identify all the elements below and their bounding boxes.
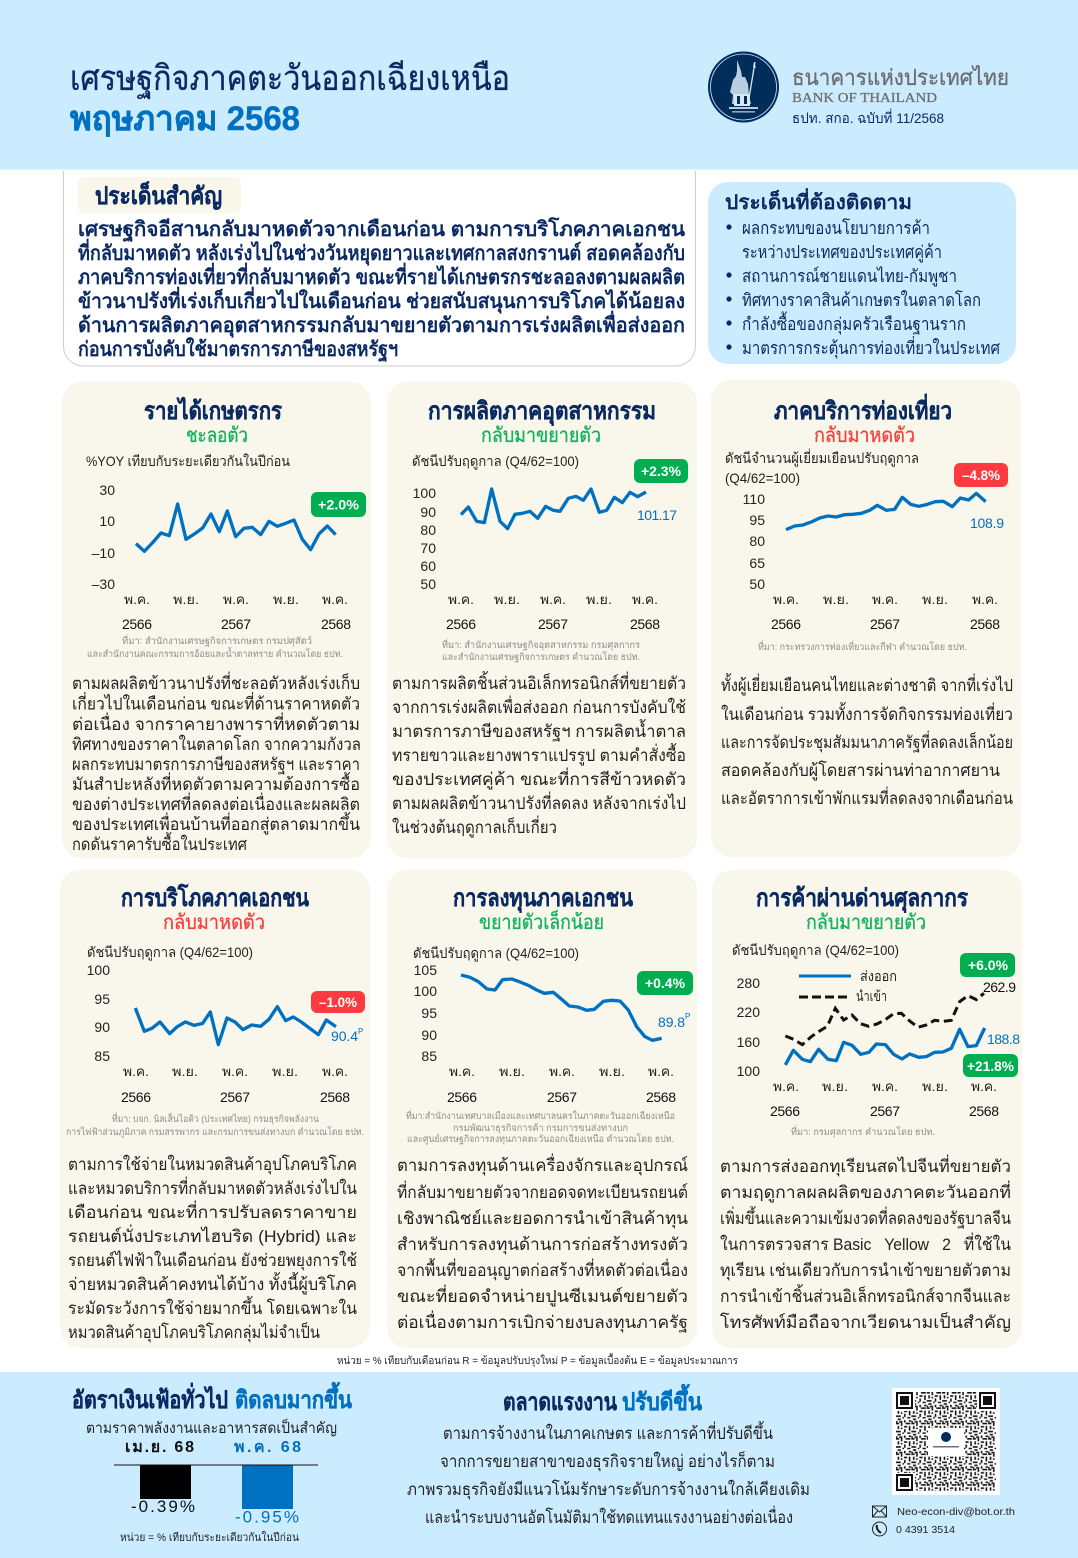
bullet list xyxy=(726,218,1000,359)
contact: phone: 0 4391 3514 xyxy=(896,1524,955,1536)
line chart: private investment: 2566 xyxy=(447,1089,477,1105)
line chart: industrial production: พ.ย. xyxy=(494,592,520,607)
text block: border trade: ในการตรวจสาร Basic Yellow 2 ที่ใช้ใน xyxy=(720,1232,1011,1254)
heading: labour market: ตลาดแรงงาน xyxy=(503,1389,617,1416)
text block: labour market xyxy=(407,1421,810,1527)
badge: +2.0%: +2.0% xyxy=(318,496,360,512)
text block: private consumption xyxy=(68,1154,357,1343)
line chart: industrial production: พ.ค. xyxy=(540,592,566,607)
source note: และสำนักงานเศรษฐกิจการเกษตร คำนวณโดย ธปท. xyxy=(442,651,640,663)
data label: 108.9: 108.9 xyxy=(970,515,1004,531)
line chart: farm income: พ.ค. xyxy=(223,592,249,607)
line chart: private investment: 90 xyxy=(421,1027,437,1043)
text block: private consumption: และหมวดบริการที่กลับมาหดตัวหลังเร่งไปใน xyxy=(68,1176,357,1198)
status: slowing: ชะลอตัว xyxy=(186,424,248,447)
line chart: border trade: พ.ค. xyxy=(971,1079,997,1094)
line chart: private investment: 95 xyxy=(421,1005,437,1021)
text block: border trade: ตามฤดูกาลผลผลิตของภาคตะวันออกที่ xyxy=(720,1180,1011,1203)
legend: exports and imports: ส่งออก xyxy=(860,968,897,984)
text block: key points summary: ที่กลับมาหดตัว หลังเร่งไปในช่วงวันหยุดยาวและเทศกาลสงกรานต์ สอดคล้องกับ xyxy=(78,238,685,266)
text block: industrial production: ตามผลผลิตข้าวนาปรังที่ลดลง หลังจากเร่งไป xyxy=(392,791,686,813)
line chart: farm income: 30 xyxy=(99,482,115,498)
bar chart: inflation: เม.ย. 68 xyxy=(125,1439,194,1456)
line chart: border trade: 220 xyxy=(737,1004,760,1020)
line chart: private investment: 105 xyxy=(414,962,437,978)
bank name xyxy=(792,65,1009,126)
source note: ที่มา:สำนักงานเทศบาลเมืองและเทศบาลนครในภาคตะวันออกเฉียงเหนือ xyxy=(406,1109,675,1122)
status: contracting: กลับมาหดตัว xyxy=(163,911,265,934)
line chart: industrial production: 70 xyxy=(420,540,436,556)
line chart: tourism services xyxy=(743,491,1000,632)
text block: border trade: ตามการส่งออกทุเรียนสดไปจีนที่ขยายตัว xyxy=(720,1154,1011,1177)
bar chart: inflation: -0.95% xyxy=(235,1508,299,1526)
panel: key points xyxy=(64,140,696,366)
text block: tourism services xyxy=(721,673,1013,808)
data label: 89.8P: 89.8 xyxy=(658,1014,685,1030)
heading: private consumption: การบริโภคภาคเอกชน xyxy=(121,883,309,912)
line chart: private investment: 2567 xyxy=(547,1089,577,1105)
source note: ที่มา: สำนักงานเศรษฐกิจการเกษตร กรมปศุสัตว์ xyxy=(122,634,312,647)
line chart: border trade: 160 xyxy=(737,1034,760,1050)
source note: ที่มา: บจก. นิลเส็นไอคิว (ประเทศไทย) กรมธุรกิจพลังงาน xyxy=(112,1112,319,1125)
chart unit: ดัชนีปรับฤดูกาล (Q4/62=100) xyxy=(412,453,579,470)
data label: 101.17: 101.17 xyxy=(637,507,677,523)
text block: private investment: ต่อเนื่องตามการเบิกจ่ายงบลงทุนภาครัฐ xyxy=(397,1310,688,1333)
line chart: industrial production: 100 xyxy=(413,485,436,501)
source note xyxy=(442,638,640,663)
text block: tourism services: ในเดือนก่อน รวมทั้งการจัดกิจกรรมท่องเที่ยว xyxy=(721,702,1013,724)
QR code xyxy=(892,1388,1000,1495)
line chart: private consumption: พ.ค. xyxy=(123,1064,149,1079)
text block: private consumption: รถยนต์นั่งประเภทไฮบริด (Hybrid) และ xyxy=(68,1224,357,1246)
source note xyxy=(66,1112,364,1138)
subtitle: month: พฤษภาคม 2568 xyxy=(70,100,300,138)
line chart: border trade: พ.ย. xyxy=(822,1079,848,1094)
line chart: private consumption: 85 xyxy=(94,1048,110,1064)
text block: tourism services: ทั้งผู้เยี่ยมเยือนคนไทยและต่างชาติ จากที่เร่งไป xyxy=(721,673,1013,696)
line chart: border trade: พ.ค. xyxy=(872,1079,898,1094)
panel: border trade xyxy=(712,870,1022,1348)
line chart: industrial production: 2566 xyxy=(446,616,476,632)
panel: private investment xyxy=(387,870,697,1348)
panel: tourism services xyxy=(711,380,1021,857)
source note: และศูนย์เศรษฐกิจการลงทุนภาคตะวันออกเฉียงเหนือ คำนวณโดย ธปท. xyxy=(407,1133,674,1145)
heading: inflation xyxy=(72,1381,352,1414)
line chart: tourism services: พ.ย. xyxy=(823,592,849,607)
source note: กรมพัฒนาธุรกิจการค้า กรมการขนส่งทางบก xyxy=(453,1123,628,1134)
line chart: farm income: –30 xyxy=(92,576,115,592)
line chart: private consumption: 2567 xyxy=(220,1089,250,1105)
text block: farm income: ของประเทศเพื่อนบ้านที่ออกสู่ตลาดมากขึ้น xyxy=(72,812,360,835)
source note: การไฟฟ้าส่วนภูมิภาค กรมสรรพากร และกรมการขนส่งทางบก คำนวณโดย ธปท. xyxy=(66,1126,364,1138)
line chart: private consumption: 2568 xyxy=(320,1089,350,1105)
text block: private investment: ขณะที่ยอดจำหน่ายปูนซีเมนต์ขยายตัว xyxy=(397,1284,688,1307)
line chart: tourism services: 2566 xyxy=(771,616,801,632)
chart unit: ดัชนีปรับฤดูกาล (Q4/62=100) xyxy=(413,945,579,962)
line chart: industrial production: พ.ย. xyxy=(586,592,612,607)
line chart: border trade: พ.ค. xyxy=(773,1079,799,1094)
bank name: ธนาคารแห่งประเทศไทย xyxy=(792,65,1009,90)
bullet list: สถานการณ์ชายแดนไทย-กัมพูชา xyxy=(742,266,957,287)
panel: industrial production xyxy=(387,382,697,858)
line chart: tourism services: พ.ย. xyxy=(922,592,948,607)
heading: industrial production: การผลิตภาคอุตสาหกรรม xyxy=(428,398,656,427)
line chart: tourism services: 65 xyxy=(749,555,765,571)
badge: +21.8% xyxy=(963,1054,1018,1077)
text block: key points summary: เศรษฐกิจอีสานกลับมาหดตัวจากเดือนก่อน ตามการบริโภคภาคเอกชน xyxy=(78,216,685,243)
chart unit xyxy=(725,449,919,486)
text block: private investment: ที่กลับมาขยายตัวจากยอดจดทะเบียนรถยนต์ xyxy=(397,1180,688,1202)
text block: industrial production: ของประเทศคู่ค้า ขณะที่การสีข้าวหดตัว xyxy=(392,767,686,790)
line chart: private consumption xyxy=(87,962,350,1105)
badge: -1.0% xyxy=(311,991,365,1013)
line chart: industrial production: 80 xyxy=(420,522,436,538)
bullet list: ผลกระทบของนโยบายการค้า xyxy=(742,218,930,238)
text block: private consumption: ตามการใช้จ่ายในหมวดสินค้าอุปโภคบริโภค xyxy=(68,1154,357,1175)
heading: farm income: รายได้เกษตรกร xyxy=(144,396,282,425)
text block: key points summary: ด้านการผลิตภาคอุตสาหกรรมกลับมาขยายตัวตามการเร่งผลิตเพื่อส่งออก xyxy=(78,310,685,338)
inflation note: ตามราคาพลังงานและอาหารสดเป็นสำคัญ xyxy=(86,1418,337,1437)
badge: +21.8%: +21.8% xyxy=(967,1058,1015,1074)
chart unit: ดัชนีปรับฤดูกาล (Q4/62=100) xyxy=(87,944,253,961)
line chart: tourism services: 2568 xyxy=(970,616,1000,632)
source note: ที่มา: กรมศุลกากร คำนวณโดย ธปท. xyxy=(791,1125,935,1138)
text block: private consumption: จ่ายหมวดสินค้าคงทนได้บ้าง ทั้งนี้ผู้บริโภค xyxy=(68,1272,357,1295)
heading: inflation: ติดลบมากขึ้น xyxy=(235,1381,352,1414)
icon: Bank of Thailand seal xyxy=(708,52,779,122)
bar chart: inflation: พ.ค. 68 xyxy=(234,1439,301,1456)
text block: industrial production: มาตรการภาษีของสหรัฐฯ การผลิตน้ำตาล xyxy=(392,719,686,742)
contact: phone xyxy=(872,1522,955,1536)
text block: border trade: เพิ่มขึ้นและความเข้มงวดที่ลดลงของรัฐบาลจีน xyxy=(720,1206,1011,1229)
bullet list: ทิศทางราคาสินค้าเกษตรในตลาดโลก xyxy=(742,290,981,310)
line chart: private investment: พ.ค. xyxy=(449,1064,475,1079)
text block: farm income xyxy=(72,671,361,854)
chart unit: (Q4/62=100) xyxy=(725,470,800,486)
badge: +0.4%: +0.4% xyxy=(645,975,686,991)
source note: ที่มา: กระทรวงการท่องเที่ยวและกีฬา คำนวณโดย ธปท. xyxy=(758,640,967,653)
text block: key points summary: ภาคบริการท่องเที่ยวที่กลับมาหดตัว ขณะที่รายได้เกษตรกรชะลอลงตามผลผลิต xyxy=(78,262,685,289)
text block: private consumption: ระมัดระวังการใช้จ่ายมากขึ้น โดยเฉพาะใน xyxy=(68,1296,357,1318)
source note: และสำนักงานคณะกรรมการอ้อยและน้ำตาลทราย คำนวณโดย ธปท. xyxy=(87,647,343,660)
line chart: farm income: 2568 xyxy=(321,616,351,632)
text block: labour market: และนำระบบงานอัตโนมัติมาใช้ทดแทนแรงงานอย่างต่อเนื่อง xyxy=(425,1505,793,1527)
badge: +6.0% xyxy=(960,953,1015,977)
line chart: farm income: พ.ค. xyxy=(322,592,348,607)
line chart: industrial production: 2568 xyxy=(630,616,660,632)
footer band xyxy=(0,1372,1078,1558)
panel: inflation xyxy=(72,1381,352,1544)
line chart: private consumption: 100 xyxy=(87,962,110,978)
heading: tourism services: ภาคบริการท่องเที่ยว xyxy=(774,393,952,425)
line chart: industrial production xyxy=(413,485,660,632)
status: contracting: กลับมาหดตัว xyxy=(814,424,915,447)
heading: issues to watch: ประเด็นที่ต้องติดตาม xyxy=(725,187,912,214)
line chart: private consumption: พ.ย. xyxy=(172,1064,198,1079)
text block: key points summary: ข้าวนาปรังที่เร่งเก็บเกี่ยวไปในเดือนก่อน ช่วยสนับสนุนการบริโภคได้น้อยลง xyxy=(78,286,685,314)
text block: private consumption: รถยนต์ไฟฟ้าในเดือนก่อน ยังช่วยพยุงการใช้ xyxy=(68,1250,357,1271)
text block: border trade: การนำเข้าชิ้นส่วนอิเล็กทรอนิกส์จากจีนและ xyxy=(720,1284,1011,1306)
line chart: border trade: 2567 xyxy=(870,1103,900,1119)
footnote: units: หน่วย = % เทียบกับเดือนก่อน R = ข้อมูลปรับปรุงใหม่ P = ข้อมูลเบื้องต้น E = ข้อมูลประมาณการ xyxy=(337,1353,738,1367)
text block: border trade: ทุเรียน เช่นเดียวกับการนำเข้าขยายตัวตาม xyxy=(720,1261,1011,1281)
line chart: industrial production: 50 xyxy=(420,576,436,592)
text block: private investment: จากพื้นที่ขออนุญาตก่อสร้างที่หดตัวต่อเนื่อง xyxy=(397,1258,688,1281)
text block: labour market: ภาพรวมธุรกิจยังมีแนวโน้มรักษาระดับการจ้างงานใกล้เคียงเดิม xyxy=(407,1479,810,1500)
line chart: border trade xyxy=(737,975,999,1119)
bar chart: inflation xyxy=(114,1439,318,1526)
text block: farm income: ผลกระทบมาตรการภาษีของสหรัฐฯ และราคา xyxy=(72,755,360,775)
badge: +6.0%: +6.0% xyxy=(968,957,1009,973)
panel: farm income xyxy=(62,382,371,858)
text block: key points summary xyxy=(78,216,685,363)
line chart: private investment: พ.ย. xyxy=(599,1064,625,1079)
line chart: private investment: พ.ค. xyxy=(648,1064,674,1079)
heading: border trade: การค้าผ่านด่านศุลกากร xyxy=(756,885,968,914)
line chart: private investment: 2568 xyxy=(646,1089,676,1105)
status: expanding again: กลับมาขยายตัว xyxy=(806,911,926,934)
bullet list: กำลังซื้อของกลุ่มครัวเรือนฐานราก xyxy=(742,311,966,335)
line chart: industrial production: 2567 xyxy=(538,616,568,632)
text block: private consumption: หมวดสินค้าอุปโภคบริโภคกลุ่มไม่จำเป็น xyxy=(68,1321,320,1343)
line chart: farm income xyxy=(92,482,351,632)
data label: 90.4P: 90.4 xyxy=(331,1028,358,1044)
line chart: border trade: 2566 xyxy=(770,1103,800,1119)
line chart: private investment: พ.ย. xyxy=(499,1064,525,1079)
source note xyxy=(87,634,343,660)
bar chart: inflation: -0.39% xyxy=(131,1497,195,1516)
heading pill: key points xyxy=(78,177,241,213)
heading: labour market: ปรับดีขึ้น xyxy=(622,1383,703,1416)
badge: +2.0% xyxy=(311,492,366,517)
source note xyxy=(406,1109,675,1145)
inflation unit: หน่วย = % เทียบกับระยะเดียวกันในปีก่อน xyxy=(120,1531,299,1544)
icon: envelope xyxy=(872,1506,886,1517)
line chart: tourism services: พ.ค. xyxy=(773,592,799,607)
data label: 90.4P: P xyxy=(358,1027,363,1036)
line chart: industrial production: 90 xyxy=(420,504,436,520)
line chart: tourism services: 110 xyxy=(743,491,765,507)
line chart: tourism services: 95 xyxy=(749,512,765,528)
text block: labour market: จากการขยายสาขาของธุรกิจรายใหญ่ อย่างไรก็ตาม xyxy=(440,1450,775,1472)
data label: 262.9: 262.9 xyxy=(983,979,1016,995)
line chart: farm income: –10 xyxy=(92,545,115,561)
contact: email: Neo-econ-div@bot.or.th xyxy=(897,1506,1015,1518)
badge: +2.3% xyxy=(634,459,688,483)
text block: industrial production: ในช่วงต้นฤดูกาลเก็บเกี่ยว xyxy=(392,815,557,838)
line chart: farm income: 10 xyxy=(99,513,115,529)
line chart: private consumption: 2566 xyxy=(121,1089,151,1105)
line chart: farm income: พ.ย. xyxy=(273,592,299,607)
text block: border trade: โทรศัพท์มือถือจากเวียดนามเป็นสำคัญ xyxy=(720,1311,1011,1332)
data label: 188.8: 188.8 xyxy=(987,1031,1020,1047)
badge: -1.0%: –1.0% xyxy=(319,994,358,1010)
text block: tourism services: และอัตราการเข้าพักแรมที่ลดลงจากเดือนก่อน xyxy=(721,786,1013,808)
text block: farm income: ของต่างประเทศที่ลดลงต่อเนื่องและผลผลิต xyxy=(72,792,360,814)
line chart: private consumption: พ.ค. xyxy=(222,1064,248,1079)
text block: industrial production xyxy=(392,671,686,838)
text block: industrial production: ทรายขาวและยางพาราแปรรูป ตามคำสั่งซื้อ xyxy=(392,743,686,766)
chart unit: ดัชนีปรับฤดูกาล (Q4/62=100) xyxy=(732,942,899,959)
legend: exports and imports xyxy=(799,968,897,1004)
badge: +2.3%: +2.3% xyxy=(641,463,682,479)
text block: tourism services: สอดคล้องกับผู้โดยสารผ่านท่าอากาศยาน xyxy=(721,760,1000,781)
text block: farm income: กดดันราคารับซื้อในประเทศ xyxy=(72,832,247,854)
line chart: tourism services: พ.ค. xyxy=(972,592,998,607)
text block: labour market: ตามการจ้างงานในภาคเกษตร และการค้าที่ปรับดีขึ้น xyxy=(443,1421,773,1443)
panel: labour market xyxy=(407,1383,810,1527)
bullet list: มาตรการกระตุ้นการท่องเที่ยวในประเทศ xyxy=(742,336,1000,359)
line chart: border trade: 280 xyxy=(737,975,760,991)
line chart: border trade: 100 xyxy=(737,1063,760,1079)
line chart: private consumption: พ.ย. xyxy=(272,1064,298,1079)
line chart: farm income: 2566 xyxy=(122,616,152,632)
bank name: ธปท. สกอ. ฉบับที่ 11/2568 xyxy=(792,109,944,126)
text block: private consumption: เดือนก่อน ขณะที่การปรับลดราคาขาย xyxy=(68,1200,357,1222)
heading: inflation: อัตราเงินเฟ้อทั่วไป xyxy=(72,1382,228,1414)
heading: labour market xyxy=(503,1383,703,1416)
line chart: private consumption: 95 xyxy=(94,991,110,1007)
text block: private investment: สำหรับการลงทุนด้านการก่อสร้างทรงตัว xyxy=(397,1235,688,1255)
status: slight expansion: ขยายตัวเล็กน้อย xyxy=(479,908,604,934)
title: เศรษฐกิจภาคตะวันออกเฉียงเหนือ xyxy=(70,59,510,99)
line chart: tourism services: 50 xyxy=(749,576,765,592)
badge: -4.8%: –4.8% xyxy=(962,467,1001,483)
text block: industrial production: ตามการผลิตชิ้นส่วนอิเล็กทรอนิกส์ที่ขยายตัว xyxy=(392,671,686,693)
line chart: border trade: 2568 xyxy=(969,1103,999,1119)
bullet list: ระหว่างประเทศของประเทศคู่ค้า xyxy=(742,242,942,263)
line chart: private investment: 85 xyxy=(421,1048,437,1064)
line chart: tourism services: พ.ค. xyxy=(872,592,898,607)
text block: farm income: มันสำปะหลังที่หดตัวตามความต้องการซื้อ xyxy=(72,772,360,794)
line chart: private investment: 100 xyxy=(414,983,437,999)
text block: border trade xyxy=(720,1154,1011,1332)
badge: -4.8% xyxy=(954,463,1008,487)
status: expanding again: กลับมาขยายตัว xyxy=(481,424,601,447)
text block: farm income: ต่อเนื่อง จากราคายางพาราที่หดตัวตาม xyxy=(72,712,360,734)
data label: 89.8P: P xyxy=(685,1012,690,1021)
line chart: private consumption: 90 xyxy=(94,1019,110,1035)
text block: farm income: เกี่ยวไปในเดือนก่อน ขณะที่ด้านราคาหดตัว xyxy=(72,692,360,714)
source note: ที่มา: สำนักงานเศรษฐกิจอุตสาหกรรม กรมศุลกากร xyxy=(442,638,640,651)
line chart: tourism services: 2567 xyxy=(870,616,900,632)
bank name: BANK OF THAILAND xyxy=(792,91,937,106)
line chart: industrial production: 60 xyxy=(420,558,436,574)
line chart: private investment xyxy=(414,962,676,1105)
text block: farm income: ทิศทางของราคาในตลาดโลก จากความกังวล xyxy=(72,734,361,754)
line chart: tourism services: 80 xyxy=(749,533,765,549)
line chart: private investment: พ.ค. xyxy=(549,1064,575,1079)
line chart: farm income: 2567 xyxy=(221,616,251,632)
line chart: border trade: พ.ย. xyxy=(922,1079,948,1094)
heading: private investment: การลงทุนภาคเอกชน xyxy=(453,885,633,914)
text block: private investment xyxy=(397,1153,688,1333)
text block: farm income: ตามผลผลิตข้าวนาปรังที่ชะลอตัวหลังเร่งเก็บ xyxy=(72,671,360,693)
line chart: farm income: พ.ย. xyxy=(173,592,199,607)
text block: key points summary: ก่อนการบังคับใช้มาตรการภาษีของสหรัฐฯ xyxy=(78,337,398,363)
text block: industrial production: จากการเร่งผลิตเพื่อส่งออก ก่อนการบังคับใช้ xyxy=(392,695,686,717)
header band xyxy=(0,0,1078,171)
text block: tourism services: และการจัดประชุมสัมมนาภาครัฐที่ลดลงเล็กน้อย xyxy=(721,730,1013,753)
line chart: industrial production: พ.ค. xyxy=(448,592,474,607)
icon: phone xyxy=(872,1522,886,1536)
chart unit: %YOY เทียบกับระยะเดียวกันในปีก่อน xyxy=(86,453,290,469)
text block: private investment: ตามการลงทุนด้านเครื่องจักรและอุปกรณ์ xyxy=(397,1153,688,1176)
line chart: private consumption: พ.ค. xyxy=(322,1064,348,1079)
line chart: industrial production: พ.ค. xyxy=(632,592,658,607)
badge: +0.4% xyxy=(637,971,693,995)
chart unit: ดัชนีจำนวนผู้เยี่ยมเยือนปรับฤดูกาล xyxy=(725,449,919,467)
heading pill: key points: ประเด็นสำคัญ xyxy=(95,181,222,210)
line chart: farm income: พ.ค. xyxy=(124,592,150,607)
legend: exports and imports: นำเข้า xyxy=(856,988,887,1004)
text block: private investment: เชิงพาณิชย์และยอดการนำเข้าสินค้าทุน xyxy=(397,1209,688,1229)
panel: issues to watch xyxy=(708,182,1016,364)
panel: private consumption xyxy=(60,870,370,1348)
